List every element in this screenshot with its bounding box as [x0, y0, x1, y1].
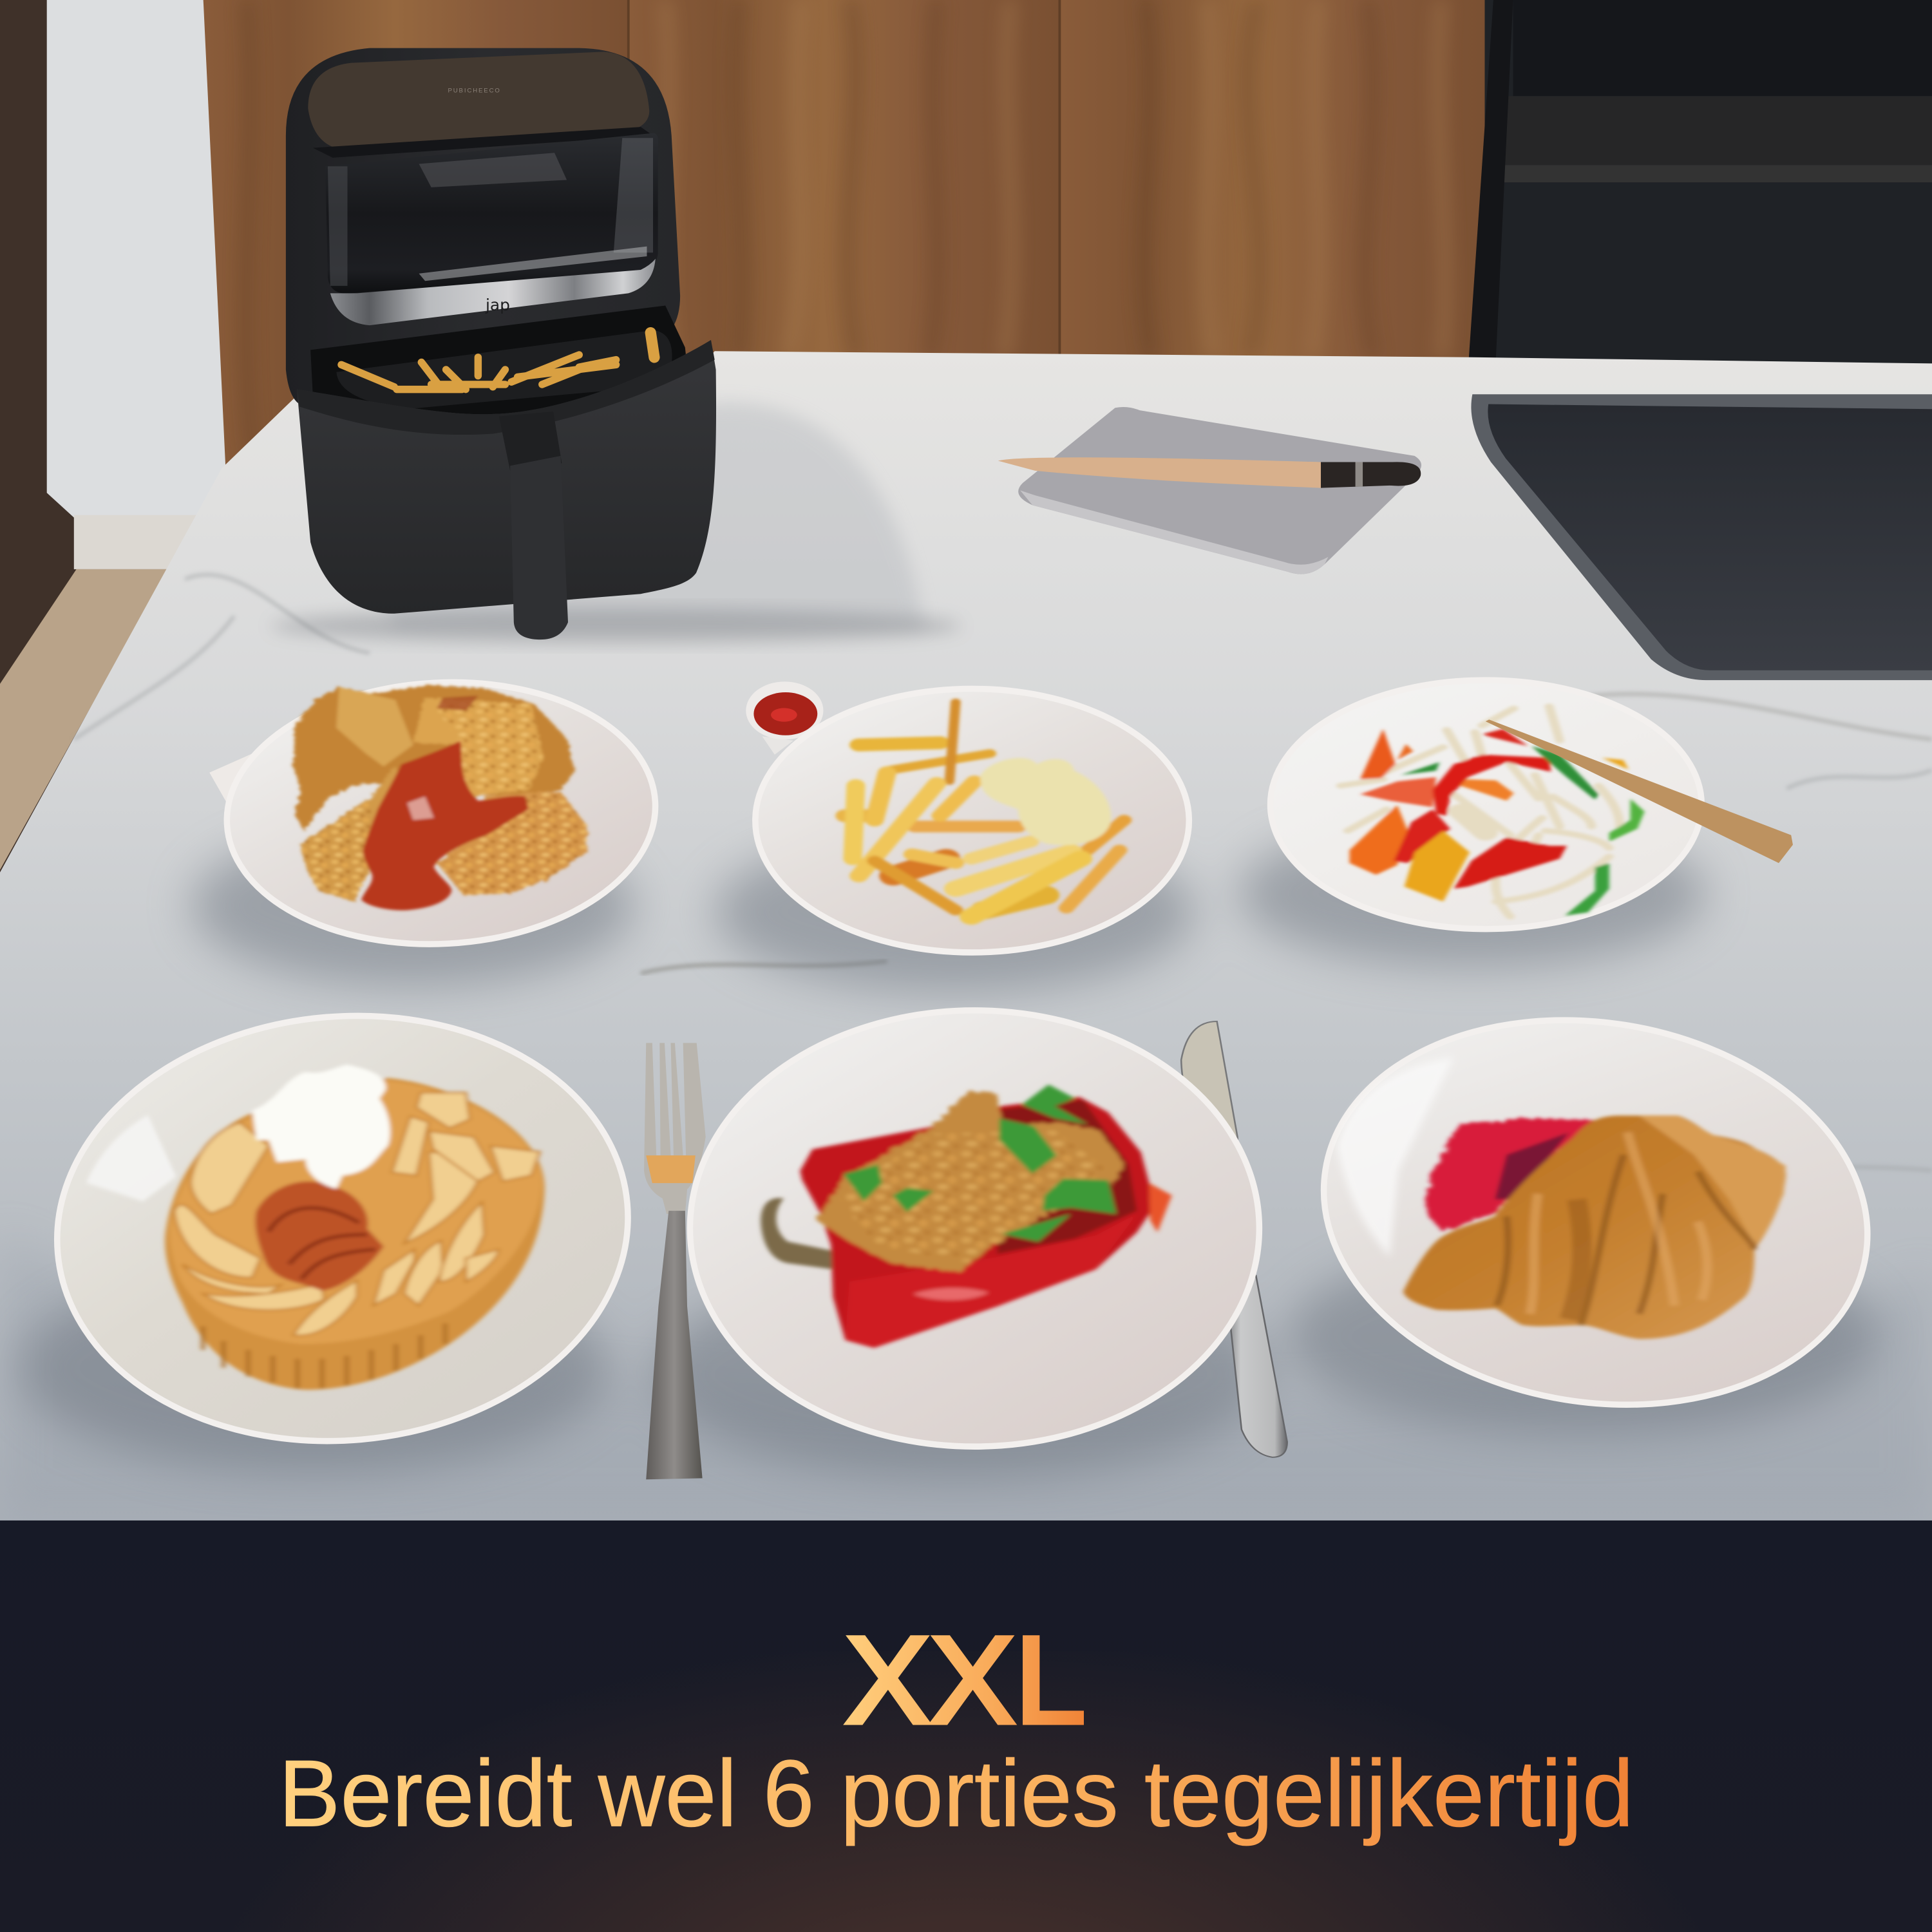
dark cabinet	[1469, 0, 1932, 366]
upper housing	[286, 48, 680, 406]
wooden cabinet panels	[204, 0, 1491, 480]
handle neck	[499, 412, 562, 471]
raspberry jam	[1425, 1119, 1596, 1231]
vegetables	[1350, 729, 1645, 916]
plate: crispy chicken	[209, 672, 662, 955]
floor	[0, 569, 167, 870]
air fryer shadow	[271, 609, 961, 643]
plate shadows	[19, 819, 1879, 1479]
croissant	[1403, 1115, 1786, 1339]
sink	[1471, 394, 1932, 680]
fries	[845, 702, 1124, 916]
plate: croissant with jam	[1296, 982, 1895, 1443]
vegetables and sprouts	[1341, 706, 1645, 916]
white pillar	[47, 0, 228, 569]
tart top	[169, 1081, 542, 1344]
ketchup cup	[746, 681, 823, 755]
top lid panel: PUBICHEECO	[448, 87, 501, 94]
air fryer	[271, 48, 961, 643]
viewing window	[325, 133, 658, 294]
napkin	[209, 734, 302, 807]
croissant folds	[1497, 1155, 1754, 1325]
chicken pieces	[294, 685, 587, 911]
basket fries	[341, 333, 654, 390]
plate highlight	[1337, 1057, 1454, 1257]
plate: fries with mayonnaise	[755, 689, 1189, 952]
knife handle	[1321, 462, 1421, 488]
drawer rim	[297, 340, 715, 435]
apple tart	[165, 1065, 545, 1390]
whipped cream	[252, 1065, 390, 1189]
jap logo: jap	[485, 296, 510, 314]
fryer opening	[310, 305, 690, 433]
fork	[644, 1043, 706, 1479]
croissant and jam	[1403, 1115, 1786, 1339]
plate: stuffed red pepper	[690, 1010, 1259, 1446]
plate highlight	[86, 1115, 176, 1201]
croissant back lobe	[1639, 1115, 1786, 1244]
parsley garnish	[843, 1084, 1116, 1242]
heading: XXL: XXL	[845, 1611, 1086, 1749]
countertop	[0, 351, 1932, 1520]
red pepper	[800, 1097, 1171, 1348]
stuffed pepper	[761, 1084, 1171, 1348]
crust flutes	[203, 1323, 445, 1388]
chrome trim	[330, 259, 656, 325]
caramel centre	[255, 1181, 384, 1291]
subheading: Bereidt wel 6 porties tegelijkertijd	[278, 1741, 1634, 1846]
cutting board and chef's knife	[998, 407, 1421, 574]
mayonnaise	[980, 758, 1111, 845]
pepper stem	[761, 1198, 833, 1269]
drawer front	[297, 340, 716, 614]
table knife	[1181, 1021, 1287, 1457]
tart crust	[165, 1078, 545, 1390]
handle	[510, 456, 568, 639]
chopsticks	[1486, 719, 1793, 863]
basket	[336, 330, 672, 409]
top lid panel	[308, 52, 653, 158]
plate: apple tart	[39, 992, 646, 1464]
chicken sauce	[361, 741, 529, 911]
plate: vegetable stir fry	[1271, 680, 1793, 929]
pepper stuffing	[817, 1091, 1124, 1273]
apple slices	[175, 1093, 540, 1336]
counter shadows and marble veins	[0, 402, 1932, 1520]
bean sprouts	[1341, 706, 1620, 916]
caption band	[0, 1520, 1932, 1932]
knife blade	[998, 457, 1321, 488]
background: kitchen wall	[0, 0, 1932, 887]
